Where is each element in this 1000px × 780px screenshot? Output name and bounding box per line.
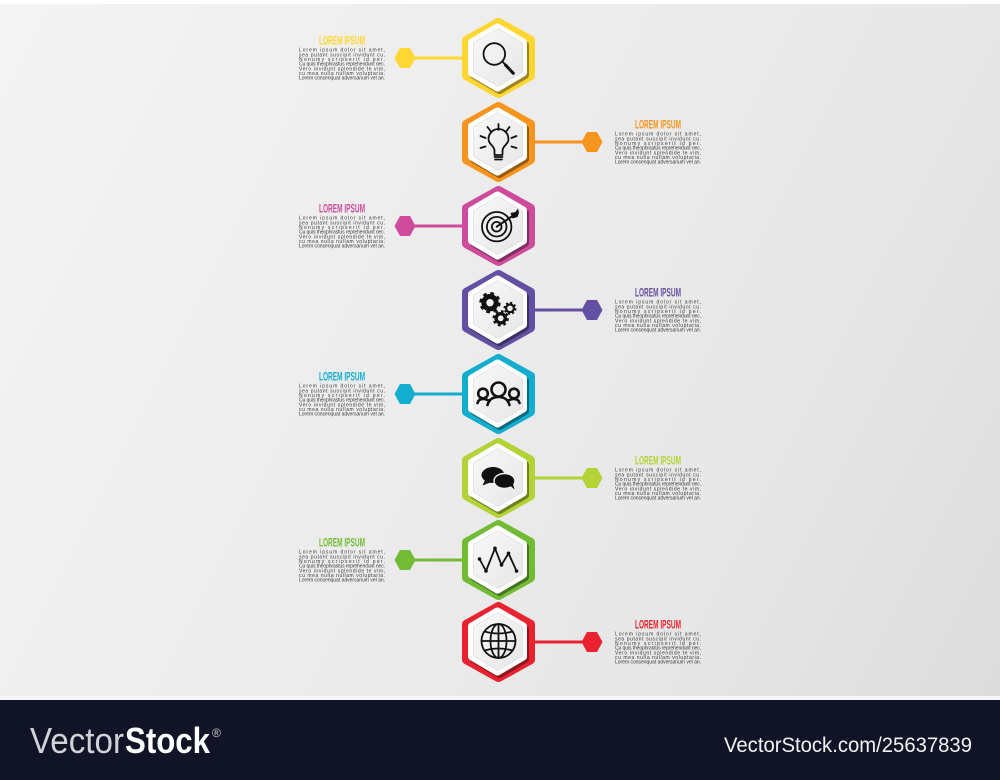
icon: magnifying glass — [484, 43, 513, 73]
connector line and node: magenta — [394, 216, 467, 236]
text block: step 5: Nonumy scripserit id per. — [299, 393, 385, 399]
text block: step 7: Vero invidunt splendide te vim, — [299, 568, 385, 574]
text block: step 5: sea putant suscipit invidunt cu. — [299, 388, 385, 394]
hexagon badge: magenta — [467, 191, 530, 261]
text block: step 7: Lorem consenquat adversarium vel an. — [299, 578, 385, 584]
hexagon badge: red — [467, 607, 530, 677]
heading: step 5: LOREM IPSUM — [319, 372, 365, 384]
text block: step 6: Cu quis theophrastus reprehendunt nec. — [615, 482, 701, 488]
footer bar — [0, 700, 1000, 780]
text block: step 2: Lorem ipsum dolor sit amet, — [615, 132, 701, 138]
text block: step 1 — [299, 48, 385, 82]
heading: step 4: LOREM IPSUM — [635, 288, 681, 300]
text block: step 8: Cu quis theophrastus reprehendunt nec. — [615, 646, 701, 652]
text block: step 4: Lorem consenquat adversarium vel an. — [615, 328, 701, 334]
text block: step 1: Lorem ipsum dolor sit amet, — [299, 48, 385, 54]
hexagon badge: orange — [467, 107, 530, 177]
text block: step 3: Lorem consenquat adversarium vel an. — [299, 244, 385, 250]
text block: step 1: Cu quis theophrastus reprehendunt nec. — [299, 62, 385, 68]
text block: step 1: Lorem consenquat adversarium vel an. — [299, 76, 385, 82]
heading: step 7: LOREM IPSUM — [319, 538, 365, 550]
connector line and node: orange — [530, 132, 602, 152]
text block: step 4: Vero invidunt splendide te vim, — [615, 318, 701, 324]
step 6: lime chat — [467, 443, 701, 513]
text block: step 2: Nonumy scripserit id per. — [615, 141, 701, 147]
text block: step 7: sea putant suscipit invidunt cu. — [299, 554, 385, 560]
text block: step 1: Vero invidunt splendide te vim, — [299, 66, 385, 72]
text block: step 1: Nonumy scripserit id per. — [299, 57, 385, 63]
text block: step 4: Nonumy scripserit id per. — [615, 309, 701, 315]
text block: step 1: cu mea nulla nullam voluptaria. — [299, 71, 385, 77]
step 4: purple gears — [467, 275, 701, 345]
text block: step 5: Lorem ipsum dolor sit amet, — [299, 384, 385, 390]
icon: globe — [482, 624, 516, 658]
text block: step 6: Nonumy scripserit id per. — [615, 477, 701, 483]
text block: step 3: Vero invidunt splendide te vim, — [299, 234, 385, 240]
hexagon badge: green — [467, 525, 530, 595]
text block: step 3: Cu quis theophrastus reprehendunt nec. — [299, 230, 385, 236]
text block: step 1: sea putant suscipit invidunt cu. — [299, 52, 385, 58]
hexagon badge: lime — [467, 443, 530, 513]
text block: step 6: cu mea nulla nullam voluptaria. — [615, 491, 701, 497]
footer logo: Vector — [30, 720, 124, 761]
icon: gears — [481, 294, 516, 325]
connector line and node: green — [394, 550, 467, 570]
connector line and node: red — [530, 632, 602, 652]
text block: step 6: sea putant suscipit invidunt cu. — [615, 472, 701, 478]
text block: step 2: Lorem consenquat adversarium vel an. — [615, 160, 701, 166]
step 3: magenta target — [299, 191, 530, 261]
heading: step 8: LOREM IPSUM — [635, 620, 681, 632]
text block: step 2 — [615, 132, 701, 166]
text block: step 8: sea putant suscipit invidunt cu. — [615, 636, 701, 642]
connector line and node: lime — [530, 468, 602, 488]
text block: step 7: Cu quis theophrastus reprehendunt nec. — [299, 564, 385, 570]
icon: speech bubbles — [482, 467, 515, 490]
text block: step 8 — [615, 632, 701, 666]
text block: step 4: Cu quis theophrastus reprehendunt nec. — [615, 314, 701, 320]
footer logo — [30, 720, 211, 761]
text block: step 6: Lorem ipsum dolor sit amet, — [615, 468, 701, 474]
text block: step 7: Nonumy scripserit id per. — [299, 559, 385, 565]
text block: step 3: Lorem ipsum dolor sit amet, — [299, 216, 385, 222]
text block: step 2: Vero invidunt splendide te vim, — [615, 150, 701, 156]
step 8: red globe — [467, 607, 701, 677]
text block: step 6: Lorem consenquat adversarium vel an. — [615, 496, 701, 502]
step 5: cyan people — [299, 359, 530, 429]
icon: line chart — [478, 546, 518, 573]
footer image id: VectorStock.com/25637839 — [724, 734, 972, 757]
text block: step 2: Cu quis theophrastus reprehendunt nec. — [615, 146, 701, 152]
text block: step 7: Lorem ipsum dolor sit amet, — [299, 550, 385, 556]
hexagon badge: purple — [467, 275, 530, 345]
text block: step 8: cu mea nulla nullam voluptaria. — [615, 655, 701, 661]
heading: step 2: LOREM IPSUM — [635, 120, 681, 132]
step 2: orange bulb — [467, 107, 701, 177]
text block: step 3: cu mea nulla nullam voluptaria. — [299, 239, 385, 245]
connector line and node: purple — [530, 300, 602, 320]
text block: step 5: Lorem consenquat adversarium vel an. — [299, 412, 385, 418]
text block: step 8: Lorem ipsum dolor sit amet, — [615, 632, 701, 638]
heading: step 6: LOREM IPSUM — [635, 456, 681, 468]
hexagon badge: cyan — [467, 359, 530, 429]
text block: step 4 — [615, 300, 701, 334]
heading: step 3: LOREM IPSUM — [319, 204, 365, 216]
footer logo: Stock — [125, 720, 211, 761]
text block: step 2: cu mea nulla nullam voluptaria. — [615, 155, 701, 161]
text block: step 5: cu mea nulla nullam voluptaria. — [299, 407, 385, 413]
text block: step 4: cu mea nulla nullam voluptaria. — [615, 323, 701, 329]
text block: step 3: Nonumy scripserit id per. — [299, 225, 385, 231]
text block: step 5: Cu quis theophrastus reprehendunt nec. — [299, 398, 385, 404]
text block: step 5 — [299, 384, 385, 418]
text block: step 4: sea putant suscipit invidunt cu. — [615, 304, 701, 310]
text block: step 3: sea putant suscipit invidunt cu. — [299, 220, 385, 226]
text block: step 2: sea putant suscipit invidunt cu. — [615, 136, 701, 142]
text block: step 8: Vero invidunt splendide te vim, — [615, 650, 701, 656]
heading: step 1: LOREM IPSUM — [319, 36, 365, 48]
step 1: yellow magnifier — [299, 23, 530, 93]
text block: step 6: Vero invidunt splendide te vim, — [615, 486, 701, 492]
text block: step 7 — [299, 550, 385, 584]
registered mark: ® — [212, 726, 221, 740]
connector line and node: yellow — [394, 48, 467, 68]
icon: people group — [478, 382, 520, 405]
step 7: green chart — [299, 525, 530, 595]
icon: target and arrow — [482, 208, 519, 241]
text block: step 8: Lorem consenquat adversarium vel an. — [615, 660, 701, 666]
text block: step 6 — [615, 468, 701, 502]
text block: step 7: cu mea nulla nullam voluptaria. — [299, 573, 385, 579]
text block: step 3 — [299, 216, 385, 250]
text block: step 5: Vero invidunt splendide te vim, — [299, 402, 385, 408]
text block: step 4: Lorem ipsum dolor sit amet, — [615, 300, 701, 306]
hexagon badge: yellow — [467, 23, 530, 93]
text block: step 8: Nonumy scripserit id per. — [615, 641, 701, 647]
icon: light bulb — [480, 124, 516, 160]
connector line and node: cyan — [394, 384, 467, 404]
